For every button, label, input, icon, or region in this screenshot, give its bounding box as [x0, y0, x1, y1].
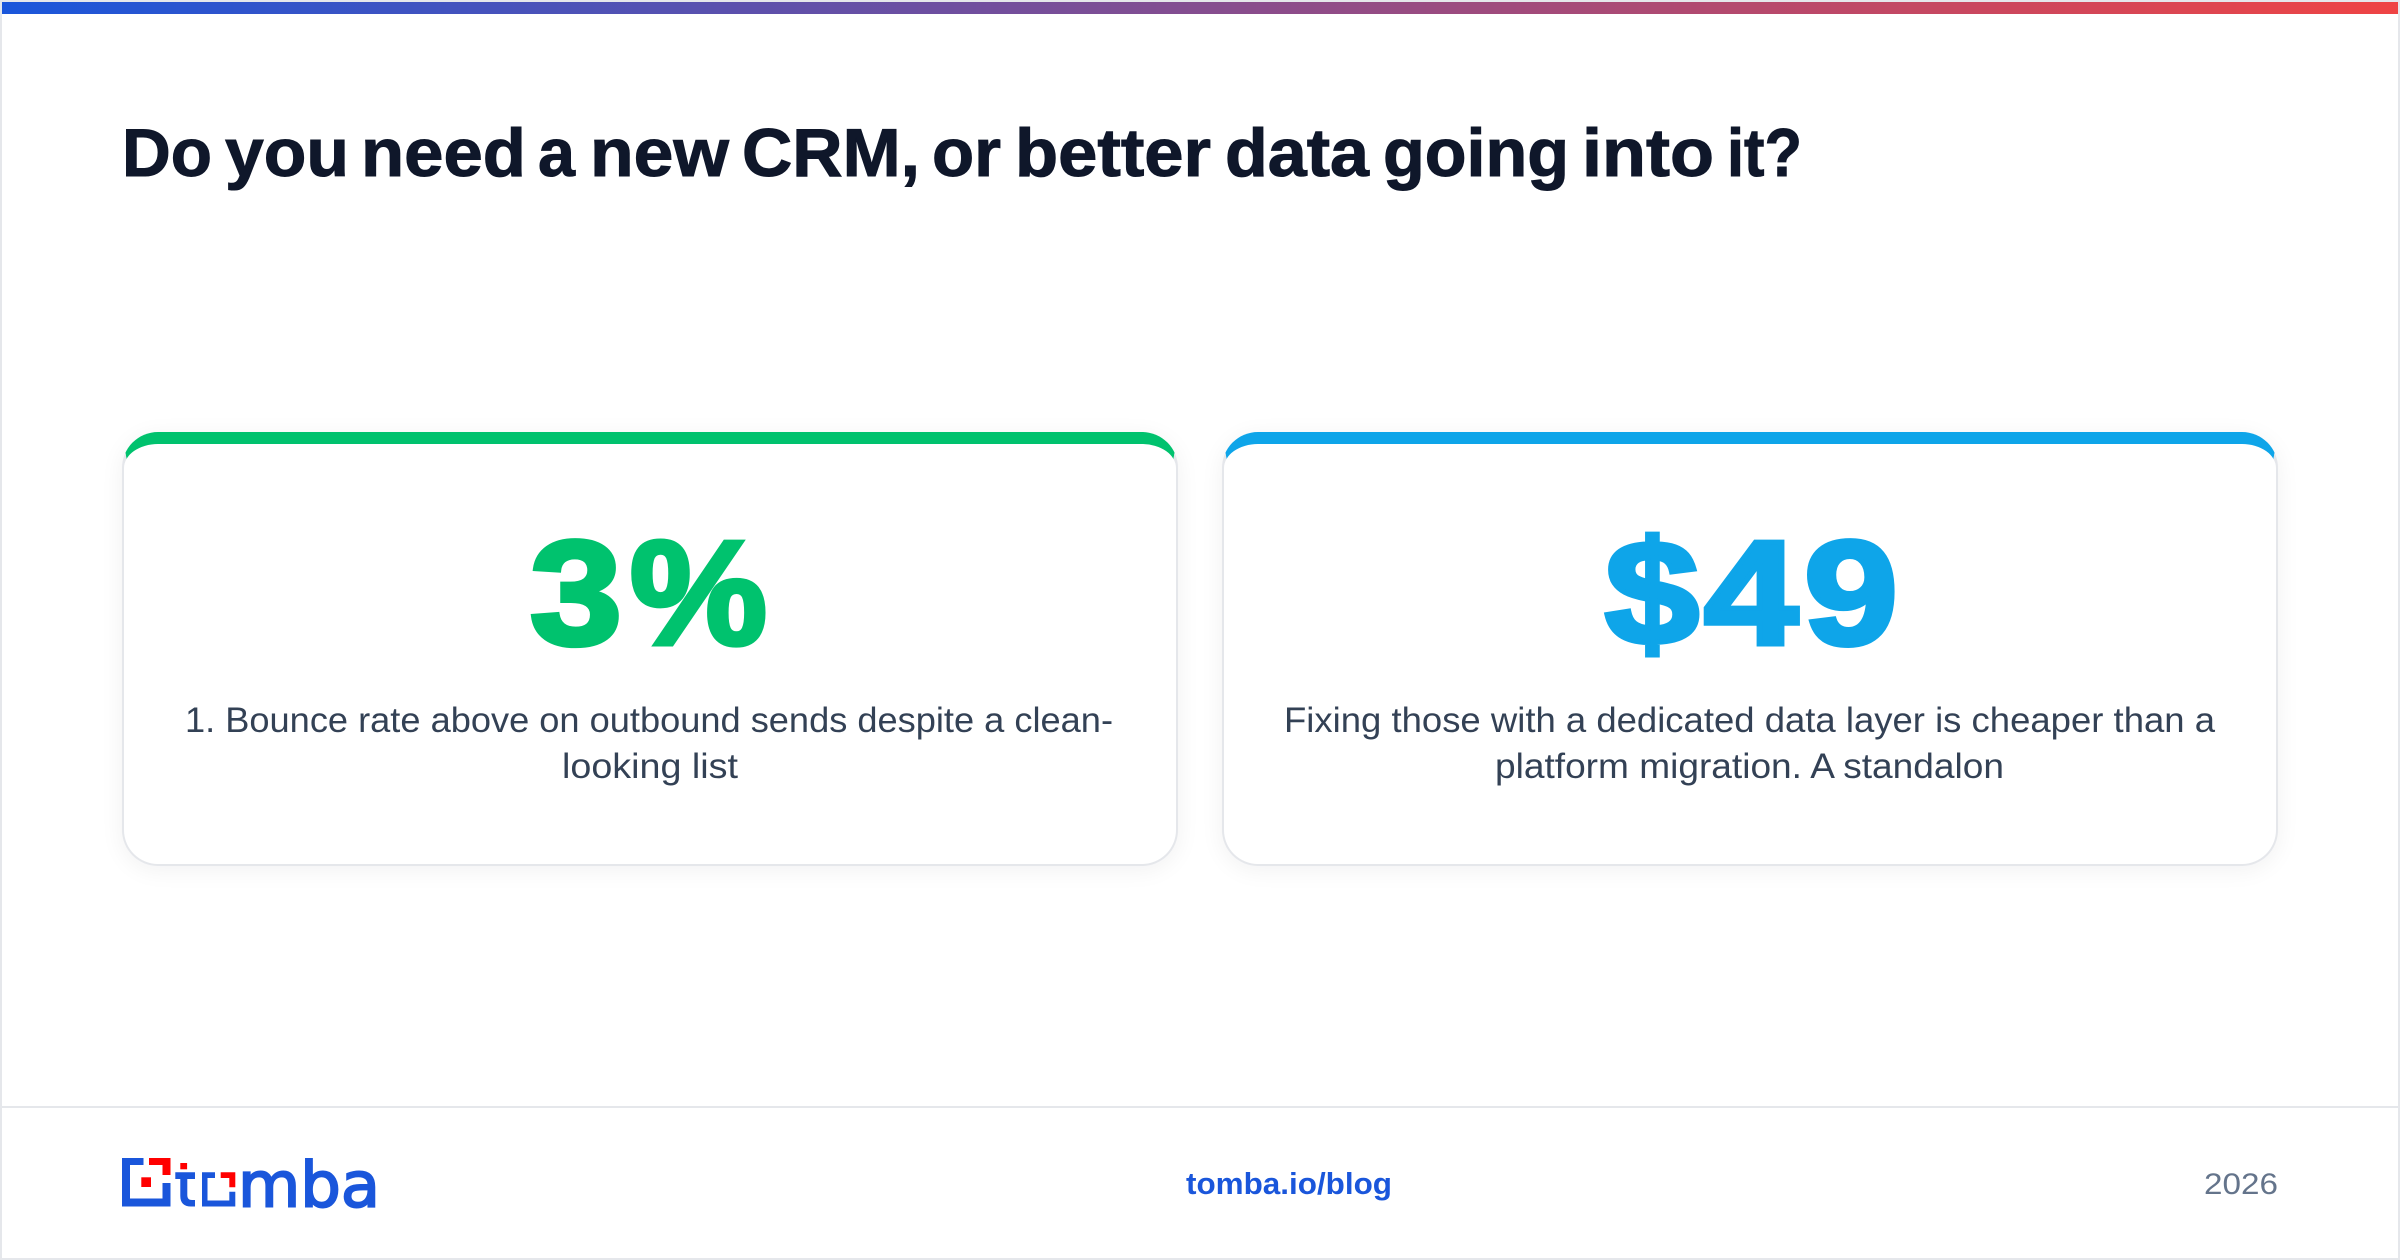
- title: better: [1015, 115, 1211, 191]
- panel: data layer price stat: [1222, 432, 2278, 866]
- title: CRM,: [742, 115, 920, 191]
- panel: bounce rate stat: [122, 432, 1178, 866]
- description text: [185, 701, 1113, 786]
- title: going: [1383, 115, 1569, 191]
- title: into: [1582, 115, 1714, 191]
- title: you: [225, 115, 349, 191]
- description text: Fixing those with a dedicated data layer is cheaper than a: [1284, 701, 2216, 740]
- title: new: [590, 115, 730, 191]
- logo letter t: [175, 1163, 195, 1206]
- big number: 3%: 3: [530, 511, 622, 676]
- logo letters mba: mba: [238, 1148, 380, 1222]
- logo: tomba: [122, 1148, 380, 1222]
- footer link: tomba.io/blog: [1186, 1166, 1392, 1201]
- stat value and description: [185, 511, 1113, 786]
- big number: $49: 9: [1804, 511, 1898, 676]
- big number: 3%: %: [630, 511, 767, 676]
- title: Do: [122, 115, 212, 191]
- footer year: 2026: [2204, 1168, 2278, 1201]
- description text: platform migration. A standalon: [1495, 747, 2004, 786]
- logo mark: [122, 1158, 170, 1206]
- title: a: [538, 115, 576, 191]
- description text: looking list: [562, 747, 738, 786]
- title: or: [932, 115, 1001, 191]
- title: [122, 115, 1802, 191]
- big number: $49: $: [1605, 511, 1699, 676]
- title: data: [1225, 115, 1370, 191]
- description text: 1. Bounce rate above on outbound sends despite a clean-: [185, 701, 1113, 740]
- top gradient bar: [2, 2, 2398, 14]
- logo letter o: [202, 1172, 235, 1206]
- big number: $49: 4: [1704, 511, 1798, 676]
- title: need: [361, 115, 526, 191]
- title: it?: [1727, 115, 1802, 191]
- stat value and description: [1284, 511, 2216, 786]
- footer divider: [2, 1106, 2398, 1108]
- description text: [1284, 701, 2216, 786]
